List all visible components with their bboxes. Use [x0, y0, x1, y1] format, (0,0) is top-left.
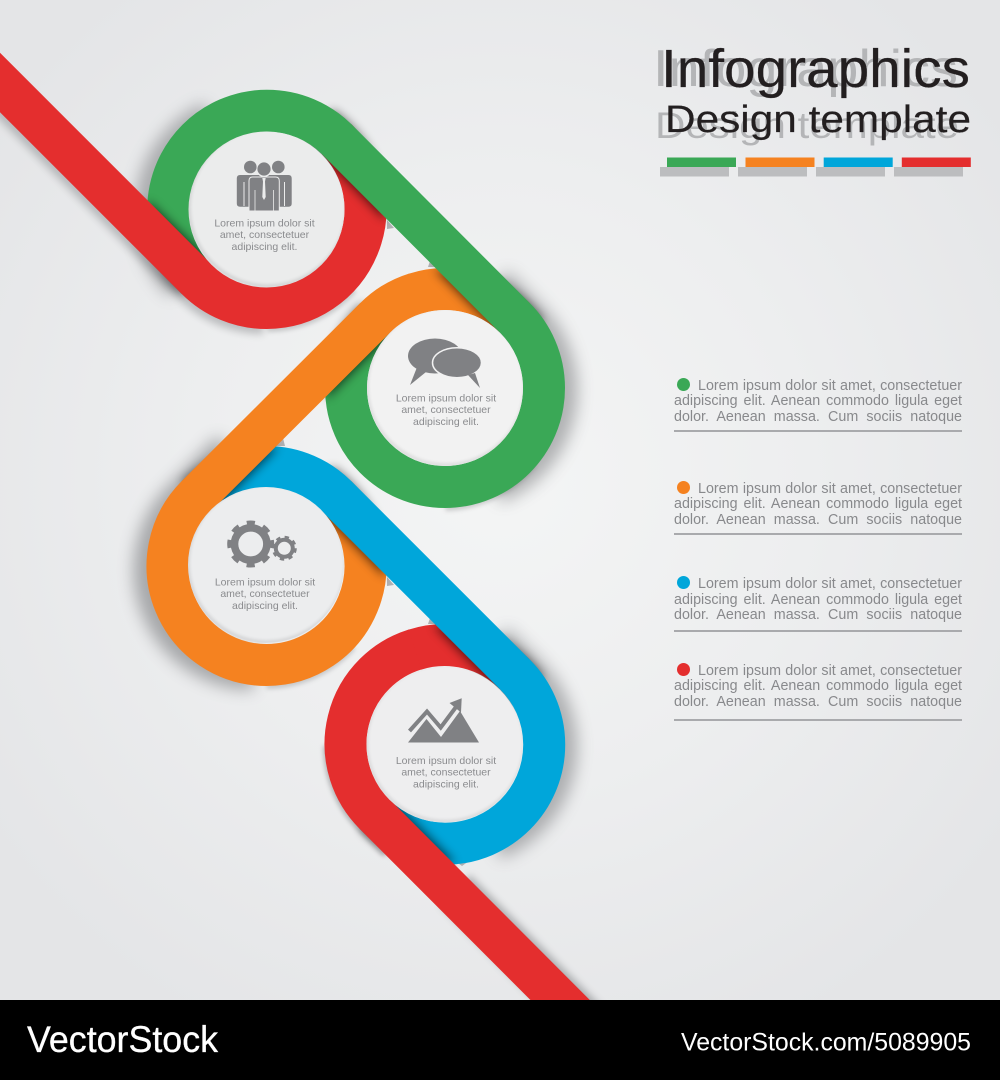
step one: team	[188, 128, 347, 288]
under layer: red end of step one	[266, 139, 365, 308]
step one caption: adipiscing elit.	[232, 241, 297, 253]
legend item: blue: Lorem ipsum dolor sit amet, consectetuer	[698, 576, 962, 592]
step one caption: Lorem ipsum dolor sit	[214, 218, 315, 230]
step three caption: amet, consectetuer	[220, 588, 310, 600]
icon: mountain chart with arrow	[408, 698, 479, 742]
orange ribbon	[168, 294, 416, 665]
legend item: red: adipiscing elit. Aenean commodo ligula eget	[674, 678, 962, 694]
step one caption: amet, consectetuer	[220, 229, 310, 241]
step four caption: Lorem ipsum dolor sit	[396, 755, 496, 767]
step two: conversation	[367, 307, 525, 466]
under layer: orange end of step three	[266, 496, 365, 665]
ribbon drop shadows	[0, 88, 605, 1040]
footer bar	[0, 1000, 1000, 1080]
legend item: red	[674, 663, 962, 721]
legend item: red: Lorem ipsum dolor sit amet, consectetuer	[698, 663, 962, 679]
step two caption: adipiscing elit.	[413, 416, 479, 428]
icon: speech bubbles	[408, 338, 482, 388]
under layer: orange start of step two	[415, 289, 515, 318]
title colour bars	[660, 158, 971, 176]
footer brand: VectorStock	[27, 1019, 218, 1060]
legend item: green: dolor. Aenean massa. Cum sociis natoque	[674, 409, 962, 425]
title shadow: Infographics	[653, 40, 958, 98]
cast shadows on green and blue ribbons	[146, 198, 458, 866]
legend item: green	[674, 378, 962, 432]
legend item: orange	[674, 480, 962, 535]
legend item: green: Lorem ipsum dolor sit amet, consectetuer	[698, 378, 962, 394]
step two caption: amet, consectetuer	[401, 404, 491, 416]
legend item: orange: adipiscing elit. Aenean commodo ligula eget	[674, 496, 962, 512]
legend item: green: adipiscing elit. Aenean commodo ligula eget	[674, 393, 962, 409]
icon: gears	[230, 523, 295, 565]
legend item: blue	[674, 576, 962, 632]
red ribbon: entry diagonal	[0, 52, 266, 308]
title: Design template	[665, 99, 971, 141]
cast shadows on under layer	[320, 122, 530, 690]
legend item: blue: adipiscing elit. Aenean commodo ligula eget	[674, 592, 962, 608]
legend item: blue: dolor. Aenean massa. Cum sociis natoque	[674, 607, 962, 623]
step four caption: adipiscing elit.	[413, 778, 479, 790]
step four caption: amet, consectetuer	[401, 767, 491, 779]
shadow notches between ribbons	[276, 220, 469, 866]
legend item: orange: dolor. Aenean massa. Cum sociis natoque	[674, 512, 962, 528]
blue ribbon	[196, 467, 544, 844]
title: Infographics	[661, 39, 970, 99]
icon: team of people	[237, 161, 292, 211]
step three caption: adipiscing elit.	[232, 600, 298, 612]
legend item: red: dolor. Aenean massa. Cum sociis natoque	[674, 694, 962, 710]
step three caption: Lorem ipsum dolor sit	[215, 577, 315, 589]
step two caption: Lorem ipsum dolor sit	[396, 393, 496, 405]
red ribbon: exit diagonal	[346, 650, 620, 1060]
legend item: orange: Lorem ipsum dolor sit amet, consectetuer	[698, 480, 962, 496]
title shadow: Design template	[655, 105, 959, 146]
green ribbon	[168, 111, 544, 487]
title shadow	[653, 40, 959, 146]
footer image id: VectorStock.com/5089905	[681, 1028, 971, 1056]
step three: settings	[188, 484, 346, 643]
step four: growth	[366, 664, 524, 822]
under layer: red start of step four	[414, 645, 514, 674]
title	[661, 39, 971, 141]
